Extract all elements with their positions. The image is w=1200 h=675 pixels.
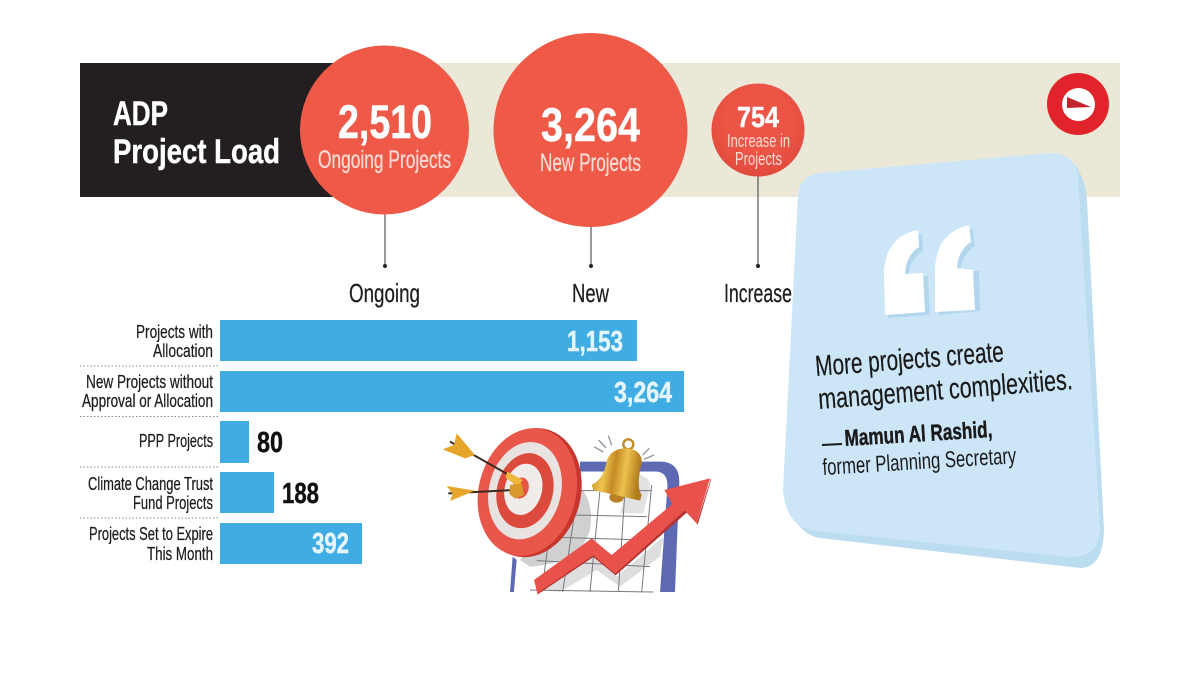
bar: projects set to expire: 392 — [312, 528, 349, 560]
circle: ongoing projects — [300, 46, 469, 214]
bar: new projects without approval: Approval or Allocation — [82, 391, 213, 411]
quote text: management complexities. — [817, 364, 1074, 416]
icon: lower arrow — [447, 483, 524, 501]
circle: ongoing projects: 2,510 — [338, 95, 432, 148]
row dividers — [80, 366, 220, 518]
icon: bullseye target — [464, 417, 595, 568]
connector: new — [589, 222, 593, 268]
quotation mark — [884, 225, 980, 318]
title — [113, 95, 280, 171]
bar: climate change trust fund — [88, 472, 319, 513]
circle: new projects — [494, 33, 688, 227]
bar: climate change trust fund: Climate Change Trust — [88, 474, 213, 494]
column labels: New — [572, 278, 609, 308]
bar: new projects without approval — [82, 371, 684, 412]
banner — [80, 63, 1120, 197]
icon: growth arrow — [534, 478, 711, 595]
column labels: Increase — [724, 278, 792, 308]
bar: projects with allocation: Projects with — [136, 322, 213, 342]
bar chart — [80, 320, 684, 564]
bar: projects set to expire — [89, 523, 362, 564]
title: ADP — [113, 95, 168, 133]
bar: PPP projects: 80 — [257, 427, 283, 459]
quote text: More projects create — [814, 336, 1005, 383]
bar: projects with allocation: Allocation — [153, 341, 213, 361]
bar: projects set to expire: Projects Set to Expire — [89, 524, 213, 544]
bar: climate change trust fund: Fund Projects — [133, 493, 213, 513]
circle: increase in projects — [712, 84, 804, 176]
attribution: former Planning Secretary — [822, 442, 1017, 480]
icon: chart board — [510, 462, 679, 592]
circle: increase in projects: Increase in — [727, 131, 790, 151]
icon: upper arrow — [443, 433, 523, 487]
bar: PPP projects: PPP Projects — [139, 431, 213, 451]
logo — [1047, 73, 1109, 135]
circle: ongoing projects: Ongoing Projects — [318, 146, 451, 174]
bar: projects with allocation: 1,153 — [567, 326, 623, 358]
connector: ongoing — [383, 210, 387, 268]
bar: projects with allocation — [136, 320, 637, 361]
bar: PPP projects — [139, 421, 283, 463]
bar: new projects without approval: New Projects without — [86, 372, 213, 392]
attribution: Mamun Al Rashid, — [844, 416, 993, 451]
title: Project Load — [113, 133, 280, 171]
card face — [783, 153, 1100, 557]
column labels: Ongoing — [349, 278, 420, 308]
circle: increase in projects: 754 — [737, 102, 779, 134]
icon: bell — [592, 436, 654, 503]
column labels — [349, 278, 792, 308]
bar: projects set to expire: This Month — [147, 544, 213, 564]
bar: new projects without approval: 3,264 — [614, 377, 672, 409]
bar: climate change trust fund: 188 — [282, 478, 319, 510]
circle: new projects: 3,264 — [541, 98, 640, 151]
circle: new projects: New Projects — [540, 149, 641, 177]
attribution — [822, 416, 1017, 480]
illustration: target, bell and growth arrow — [443, 417, 711, 595]
card shadow — [790, 165, 1104, 568]
circle: increase in projects: Projects — [735, 149, 782, 169]
quote card — [783, 153, 1104, 568]
connector: increase — [756, 172, 760, 268]
quote text — [814, 336, 1074, 416]
